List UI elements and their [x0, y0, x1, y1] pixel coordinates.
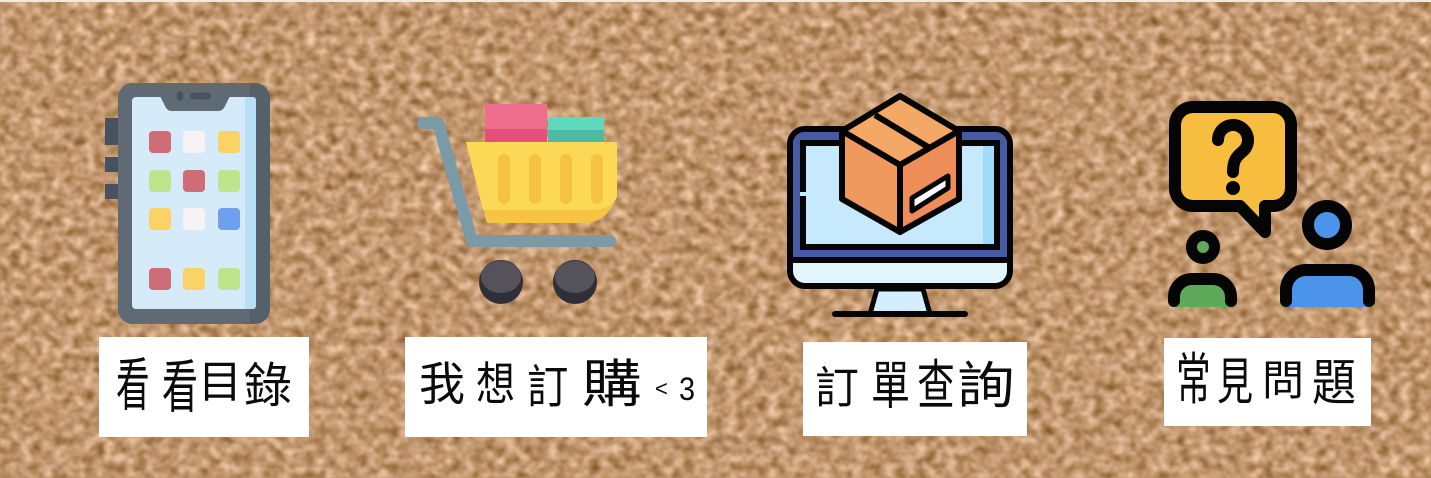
label: 我想訂購<3: 3: [679, 372, 695, 407]
label: 我想訂購<3: 想: [476, 359, 515, 411]
label: 看看目錄: [99, 337, 309, 437]
label: 常見問題: [1164, 338, 1371, 426]
label: 我想訂購<3: 購: [582, 355, 642, 413]
icon: question bubble with two people: [1174, 107, 1369, 307]
label: 我想訂購<3: [405, 337, 707, 437]
label: 訂單查詢: 單: [871, 356, 910, 415]
label: 常見問題: 常: [1176, 349, 1211, 411]
label: 我想訂購<3: 我: [419, 358, 465, 410]
label: 常見問題: 題: [1312, 354, 1356, 411]
label: 訂單查詢: [803, 342, 1027, 436]
label: 看看目錄: 錄: [244, 360, 292, 413]
label: 我想訂購<3: <: [655, 376, 668, 401]
label: 看看目錄: 看: [162, 357, 198, 420]
label: 常見問題: 見: [1217, 355, 1253, 410]
icon: shopping cart: [423, 104, 617, 304]
label: 我想訂購<3: 訂: [527, 362, 568, 414]
label: 看看目錄: 目: [198, 358, 242, 407]
label: 常見問題: 問: [1262, 357, 1304, 404]
label: 看看目錄: 看: [116, 352, 150, 417]
label: 訂單查詢: 詢: [957, 358, 1014, 414]
icon: smartphone: [105, 83, 270, 324]
label: 訂單查詢: 訂: [815, 364, 859, 413]
label: 訂單查詢: 查: [917, 355, 955, 416]
icon: computer with parcel: [790, 96, 1010, 314]
